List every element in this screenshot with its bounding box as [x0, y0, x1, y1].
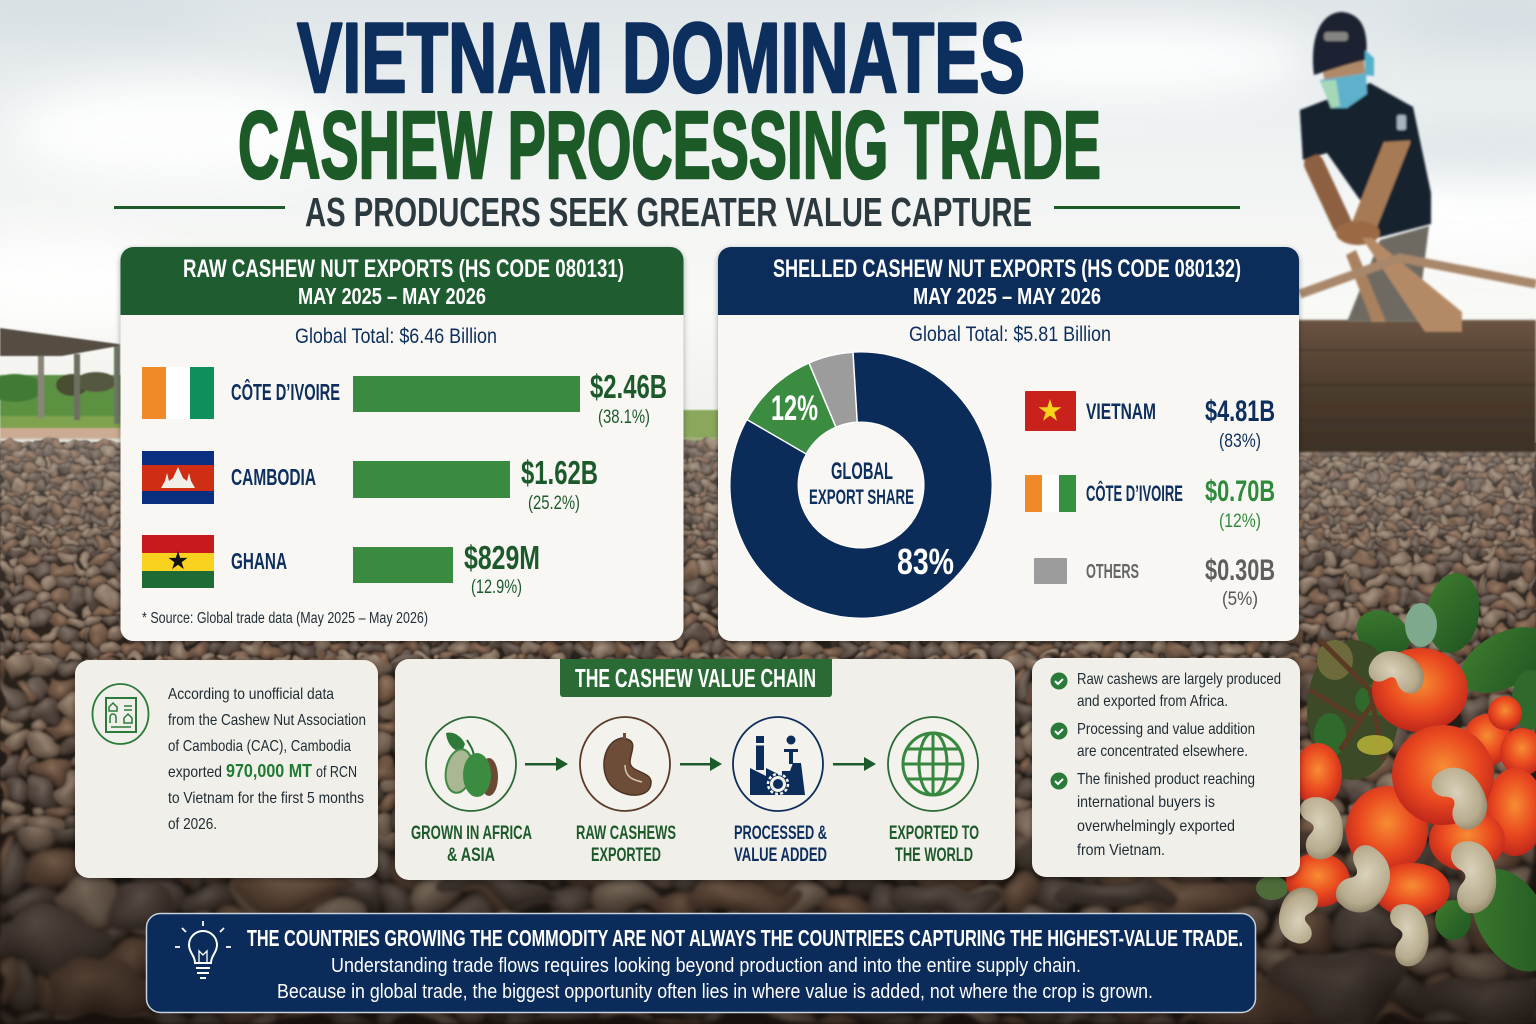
title: VIETNAM DOMINATES [297, 2, 1025, 113]
note text [168, 686, 366, 833]
checklist text: international buyers is [1077, 794, 1215, 811]
value: Ghana: (12.9%) [471, 577, 522, 598]
panel: Cambodia note [75, 660, 378, 878]
label: Cambodia: CAMBODIA [231, 464, 316, 490]
legend: Others: OTHERS [1086, 561, 1139, 583]
shelled panel header [718, 247, 1299, 315]
legend: Vietnam [1025, 391, 1275, 452]
value: Ghana [464, 539, 540, 598]
step 3: processed and value added [733, 717, 827, 866]
legend: Côte d'Ivoire: $0.70B [1205, 475, 1275, 508]
flag: Côte d'Ivoire [142, 367, 214, 419]
step 2: raw cashews exported: EXPORTED [591, 845, 661, 866]
legend: Others: (5%) [1222, 589, 1258, 610]
foliage [1307, 640, 1536, 780]
panel: the cashew value chain [395, 659, 1015, 880]
step 4: exported to the world: EXPORTED TO [889, 823, 979, 844]
icon: trade document [92, 684, 148, 744]
panel: raw cashew nut exports [120, 247, 684, 641]
step 1: grown in Africa and Asia: GROWN IN AFRICA [411, 823, 532, 844]
checklist text: are concentrated elsewhere. [1077, 743, 1248, 760]
raw global total: Global Total: $6.46 Billion [295, 325, 497, 348]
label: Côte d'Ivoire: CÔTE D’IVOIRE [231, 378, 340, 405]
step 1: grown in Africa and Asia: & ASIA [447, 845, 495, 866]
raw panel header [120, 247, 684, 315]
arrow 2 [680, 757, 722, 771]
checklist text: Raw cashews are largely produced [1077, 671, 1281, 688]
panel: key takeaways checklist [1032, 658, 1300, 877]
checklist text: and exported from Africa. [1077, 693, 1228, 710]
step 4: exported to the world [888, 717, 979, 866]
bar: Ghana [353, 547, 453, 583]
legend: Côte d'Ivoire: CÔTE D’IVOIRE [1086, 481, 1183, 506]
value: Côte d'Ivoire [590, 368, 667, 428]
checklist text: The finished product reaching [1077, 771, 1255, 788]
banner line 2: Understanding trade flows requires looking beyond production and into the entire supply chain. [331, 955, 1081, 977]
worker raking cashews [1300, 12, 1536, 332]
checklist text: from Vietnam. [1077, 842, 1165, 859]
step 3: processed and value added: VALUE ADDED [734, 845, 827, 866]
legend: Others [1034, 554, 1275, 610]
value: Cambodia: $1.62B [521, 454, 598, 491]
step 2: raw cashews exported: RAW CASHEWS [576, 823, 676, 844]
value: Cambodia [521, 454, 598, 514]
value: Cambodia: (25.2%) [528, 493, 580, 514]
checklist text [1077, 671, 1281, 859]
subtitle: AS PRODUCERS SEEK GREATER VALUE CAPTURE [305, 189, 1032, 235]
background: farm shelter and trees [0, 328, 722, 444]
source note: * Source: Global trade data (May 2025 – May 2026) [142, 610, 428, 627]
note text: exported [168, 764, 222, 781]
raw panel header: MAY 2025 – MAY 2026 [298, 283, 486, 309]
donut chart: global export share: GLOBAL [831, 458, 893, 485]
flag: Cambodia [142, 451, 214, 504]
bar: Cambodia [353, 461, 510, 498]
legend: Others: $0.30B [1205, 554, 1275, 587]
step 4: exported to the world: THE WORLD [895, 845, 973, 866]
donut chart: global export share [730, 352, 992, 618]
arrow 1 [525, 757, 568, 771]
note text: of RCN [316, 764, 357, 781]
shelled panel header: SHELLED CASHEW NUT EXPORTS (HS CODE 080132) [773, 255, 1241, 283]
value: Côte d'Ivoire: (38.1%) [598, 407, 650, 428]
label: Ghana: GHANA [231, 548, 287, 574]
panel: shelled cashew nut exports [718, 247, 1299, 641]
checklist text: Processing and value addition [1077, 721, 1255, 738]
shelled panel header: MAY 2025 – MAY 2026 [913, 283, 1101, 309]
note text: 970,000 MT [226, 761, 312, 781]
checklist text: overwhelmingly exported [1077, 818, 1235, 835]
background: sky [0, 0, 1536, 470]
background: wooden raking trough [1296, 320, 1536, 452]
check icons [1050, 672, 1068, 790]
donut chart: global export share: 12% [771, 389, 818, 428]
flag: Ghana [142, 535, 214, 588]
donut chart: global export share: 83% [897, 541, 954, 582]
shelled global total: Global Total: $5.81 Billion [909, 323, 1111, 346]
legend: Vietnam: VIETNAM [1086, 399, 1156, 424]
legend: Côte d'Ivoire: (12%) [1219, 511, 1261, 532]
step 1: grown in Africa and Asia [411, 717, 532, 866]
arrow 3 [833, 757, 876, 771]
step 2: raw cashews exported [576, 717, 676, 866]
legend: Vietnam: (83%) [1219, 431, 1261, 452]
note text: of Cambodia (CAC), Cambodia [168, 738, 351, 755]
note text: According to unofficial data [168, 686, 334, 703]
legend: Côte d'Ivoire [1025, 475, 1275, 532]
value: Ghana: $829M [464, 539, 540, 576]
cashew apples and nuts cluster [1256, 570, 1536, 985]
icon: light bulb [175, 921, 231, 978]
legend: Vietnam: $4.81B [1205, 395, 1275, 428]
note text: from the Cashew Nut Association [168, 712, 366, 729]
cashew apples [1286, 648, 1536, 917]
leaves [1256, 570, 1536, 985]
bar: Côte d'Ivoire [353, 376, 580, 412]
raw panel header: RAW CASHEW NUT EXPORTS (HS CODE 080131) [183, 255, 624, 283]
title [238, 2, 1101, 199]
note text: to Vietnam for the first 5 months [168, 790, 364, 807]
value: Côte d'Ivoire: $2.46B [590, 368, 667, 405]
bottom banner [146, 914, 1256, 1012]
cashew nuts [1271, 641, 1496, 966]
note text: of 2026. [168, 816, 217, 833]
donut chart: global export share: EXPORT SHARE [809, 486, 914, 509]
step 3: processed and value added: PROCESSED & [734, 823, 827, 844]
banner line 3: Because in global trade, the biggest opportunity often lies in where value is added, not where the crop is grown. [277, 981, 1153, 1003]
value chain heading [560, 659, 832, 697]
value chain heading: THE CASHEW VALUE CHAIN [575, 663, 816, 693]
background: drying floor of cashew nuts [0, 437, 1536, 1024]
